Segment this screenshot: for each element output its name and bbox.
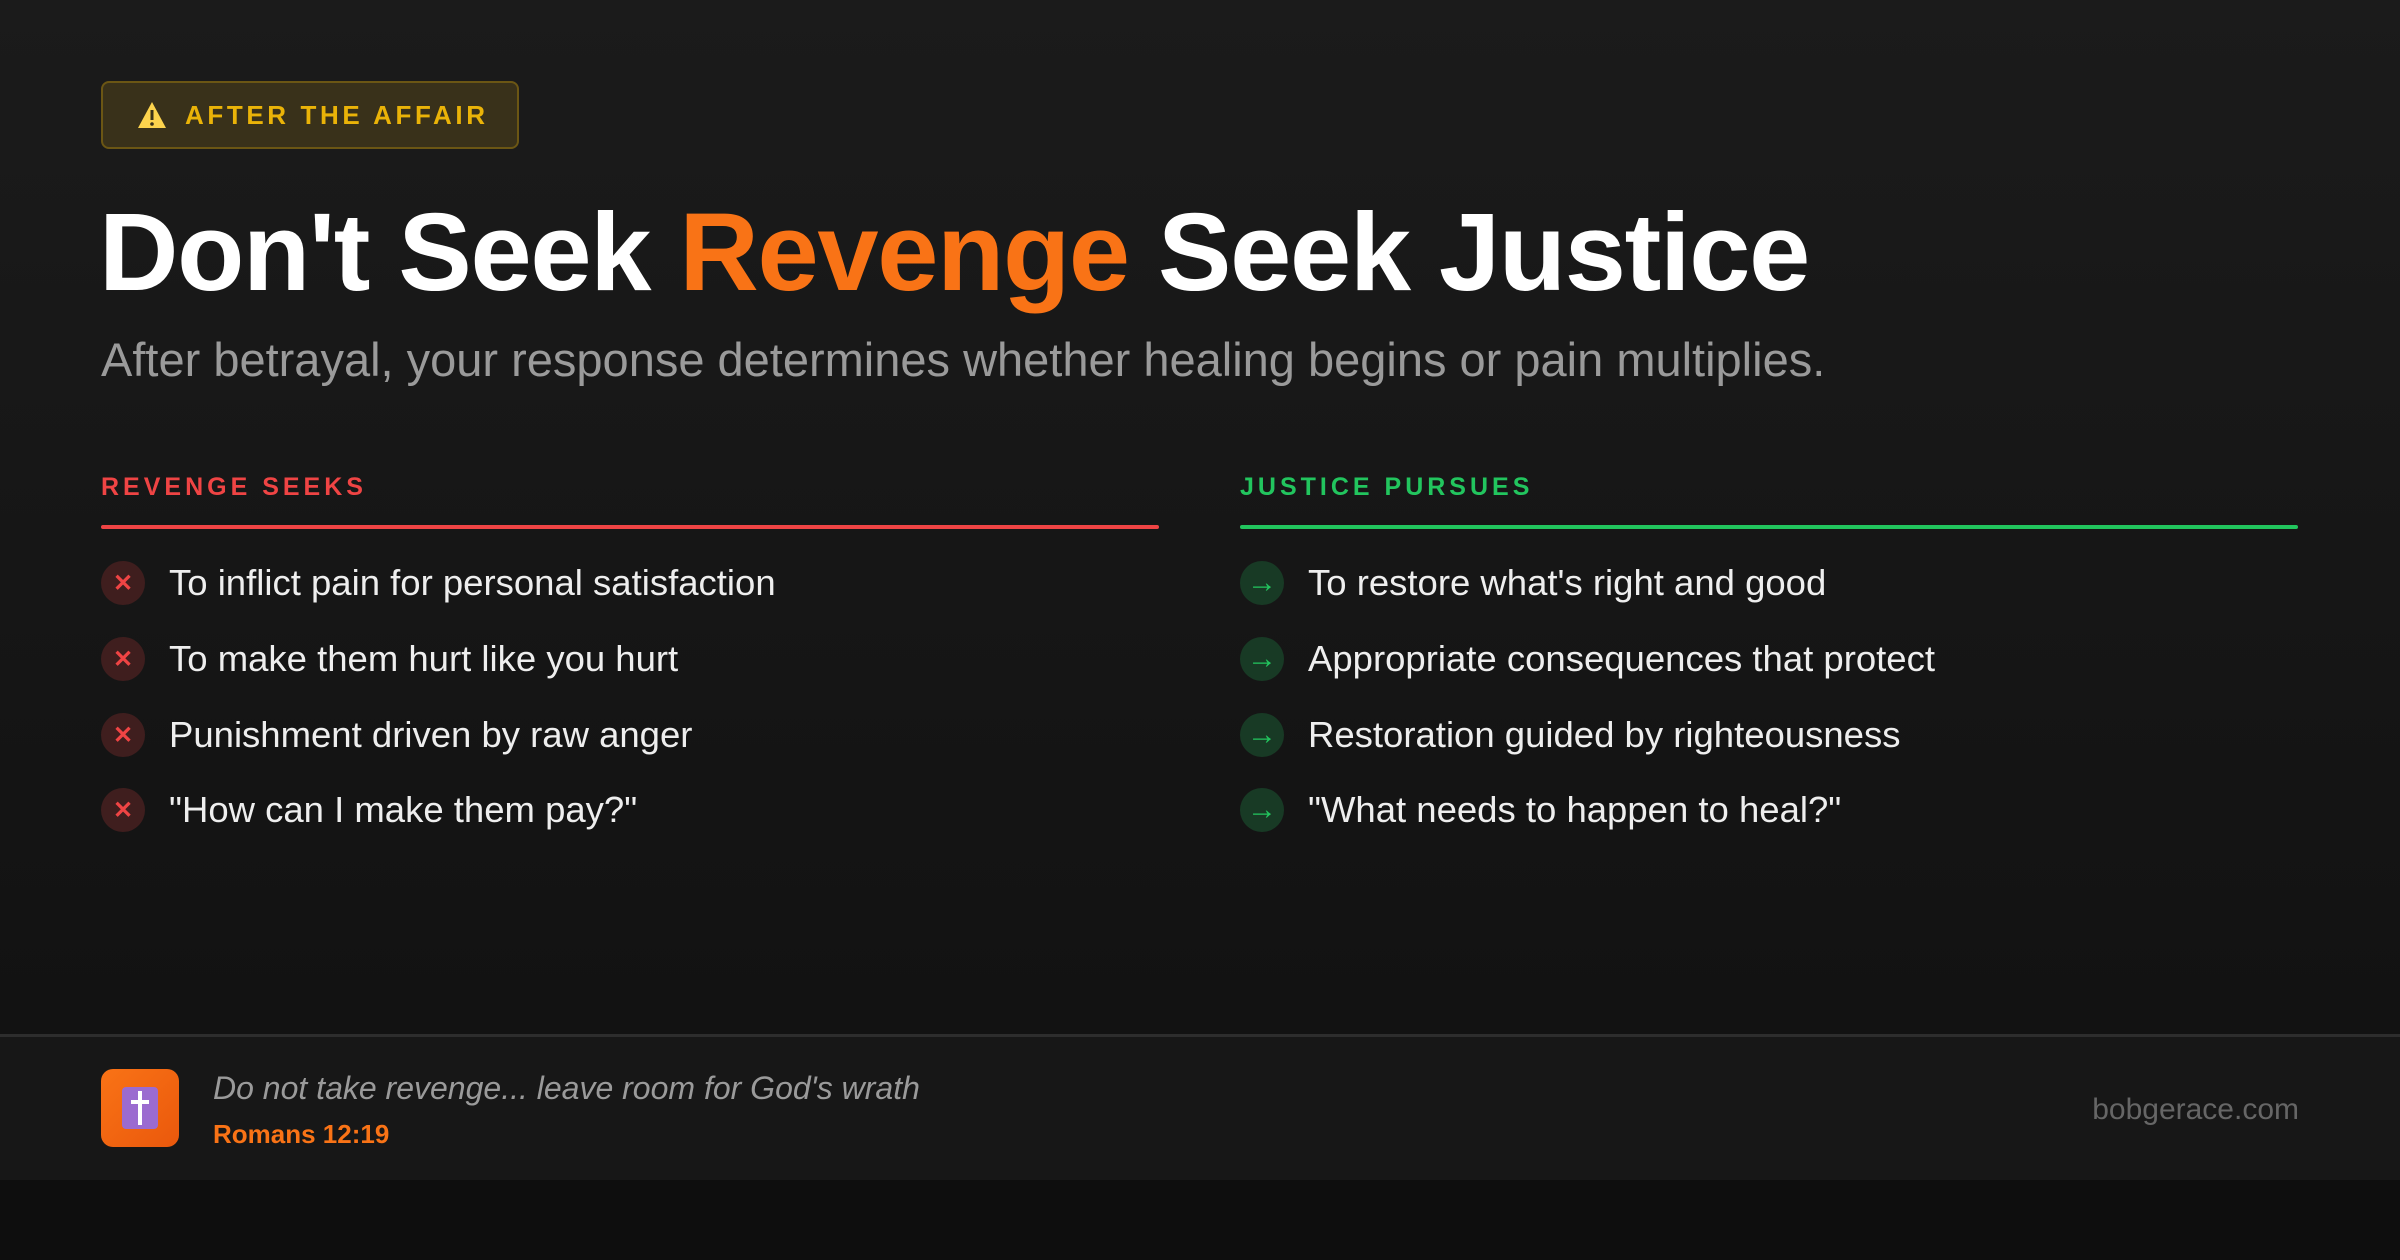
item 4: ✕ [113,796,133,824]
item 4: → [1247,793,1277,826]
panel: justice pursues [1240,473,2298,832]
item 3: ✕ [113,722,133,748]
icon: cross [101,1069,179,1147]
item 2: Appropriate consequences that protect [1308,638,1935,679]
subtitle: After betrayal, your response determines whether healing begins or pain multiplies. [101,333,1825,386]
item 1: To inflict pain for personal satisfaction [169,562,776,603]
item 1: ✕ [113,570,133,596]
website: bobgerace.com [2092,1093,2299,1126]
footer [0,1034,2400,1180]
item 2: To make them hurt like you hurt [169,638,678,679]
item 3: Punishment driven by raw anger [169,714,692,755]
panel: revenge seeks [101,473,1159,832]
title: Don't Seek Revenge Seek Justice [99,191,1809,314]
item 3: → [1247,718,1277,751]
reference: Romans 12:19 [213,1119,389,1149]
item 4: "How can I make them pay?" [169,789,637,830]
heading: revenge seeks: REVENGE SEEKS [101,473,367,501]
quote: Do not take revenge... leave room for God's wrath [213,1070,920,1106]
item 4: "What needs to happen to heal?" [1308,789,1841,830]
badge: after the affair [101,81,519,149]
item 1: To restore what's right and good [1308,562,1826,603]
heading: justice pursues: JUSTICE PURSUES [1240,473,1533,501]
item 1: → [1247,566,1277,599]
item 2: → [1247,642,1277,675]
item 3: Restoration guided by righteousness [1308,714,1900,755]
item 2: ✕ [113,646,133,672]
badge: after the affair: AFTER THE AFFAIR [185,100,489,130]
